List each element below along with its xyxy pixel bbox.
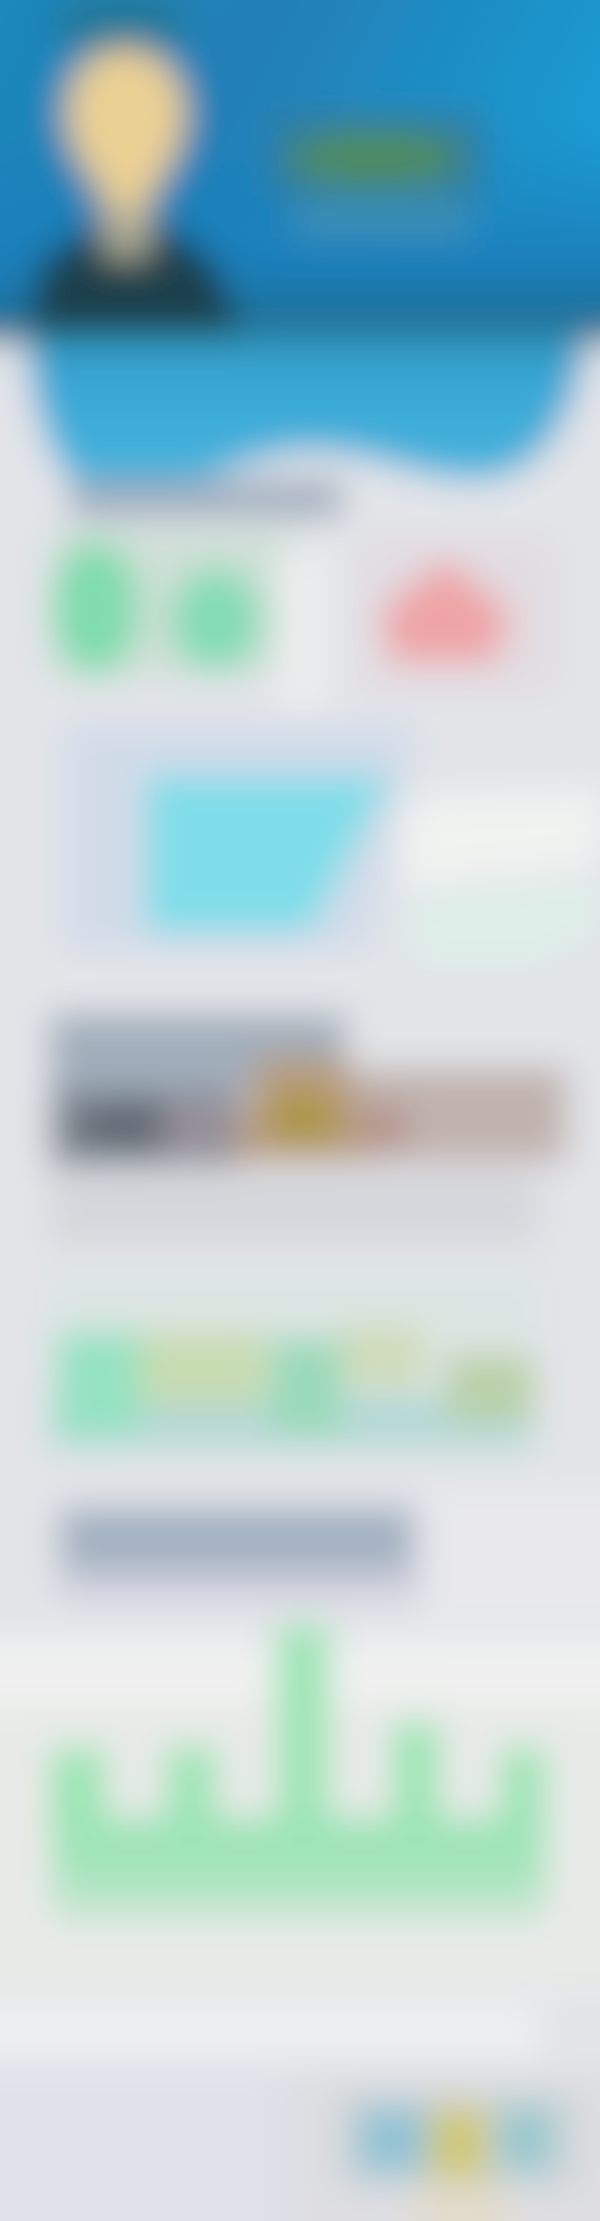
panel: header banner: [0, 0, 600, 342]
green wash: [50, 530, 290, 675]
tile 3: [270, 1338, 342, 1436]
right column light: [430, 1490, 600, 1620]
teal base: [50, 1396, 532, 1446]
caption band: [50, 1172, 538, 1244]
red badge halo: [360, 540, 555, 690]
footer left: [0, 2072, 280, 2221]
subheading text block: [60, 1568, 418, 1596]
sub-headline text block: [295, 200, 470, 238]
footer yellow logo: [430, 2106, 488, 2180]
icon: green badge left: [51, 540, 139, 676]
panel: footer: [0, 2072, 600, 2221]
white callout: [400, 790, 600, 885]
footer logo band: [335, 2092, 580, 2188]
footnote text block: [0, 2005, 540, 2057]
panel: blue wave: [26, 335, 586, 502]
panel: chart background: [0, 1692, 600, 1992]
mint callout: [410, 880, 600, 965]
panel: cyan chart area: [65, 725, 600, 965]
headline halo: [270, 112, 485, 197]
bar 4: [392, 1722, 440, 1840]
orange dome: [232, 1056, 368, 1162]
heading bar: section one: [70, 480, 342, 518]
panel: coloured tiles: [50, 1275, 540, 1460]
bar 1: [50, 1748, 106, 1840]
icon: green badge right: [170, 568, 262, 672]
bar 5: [500, 1748, 546, 1840]
heading bar: section five: [60, 1508, 414, 1568]
tan right: [345, 1068, 567, 1162]
tile band pale: [50, 1275, 540, 1460]
divider column: [278, 552, 326, 707]
grey top band: [50, 1014, 346, 1090]
portrait: neck: [98, 185, 154, 258]
mauve middle: [165, 1098, 237, 1160]
tile 1: [56, 1332, 140, 1436]
panel: photo strip: [50, 1014, 567, 1244]
pale surround: [65, 725, 418, 950]
footer right: [280, 2072, 600, 2221]
icon: red badge: [380, 558, 510, 662]
bar chart: [50, 1625, 546, 1922]
tile 4: [342, 1325, 424, 1387]
bar 3: [276, 1625, 330, 1840]
dark lower left: [50, 1090, 240, 1166]
chart baseline block: [52, 1818, 546, 1922]
bar 2: [165, 1746, 217, 1840]
footer warm shade: [415, 2185, 510, 2221]
portrait: head: [67, 48, 185, 216]
headline text block: [287, 130, 463, 186]
footer blue logo right: [498, 2106, 554, 2172]
portrait: hair shade: [50, 0, 190, 52]
chart highlight band: [0, 1640, 600, 1702]
portrait: dark jacket: [28, 218, 245, 342]
tile 2: [140, 1332, 265, 1404]
footer blue logo left: [358, 2106, 426, 2174]
panel: metric icons: [50, 530, 555, 707]
gold centre: [265, 1088, 341, 1148]
tile 5: [446, 1355, 534, 1421]
cyan trapezoid: [146, 775, 392, 932]
